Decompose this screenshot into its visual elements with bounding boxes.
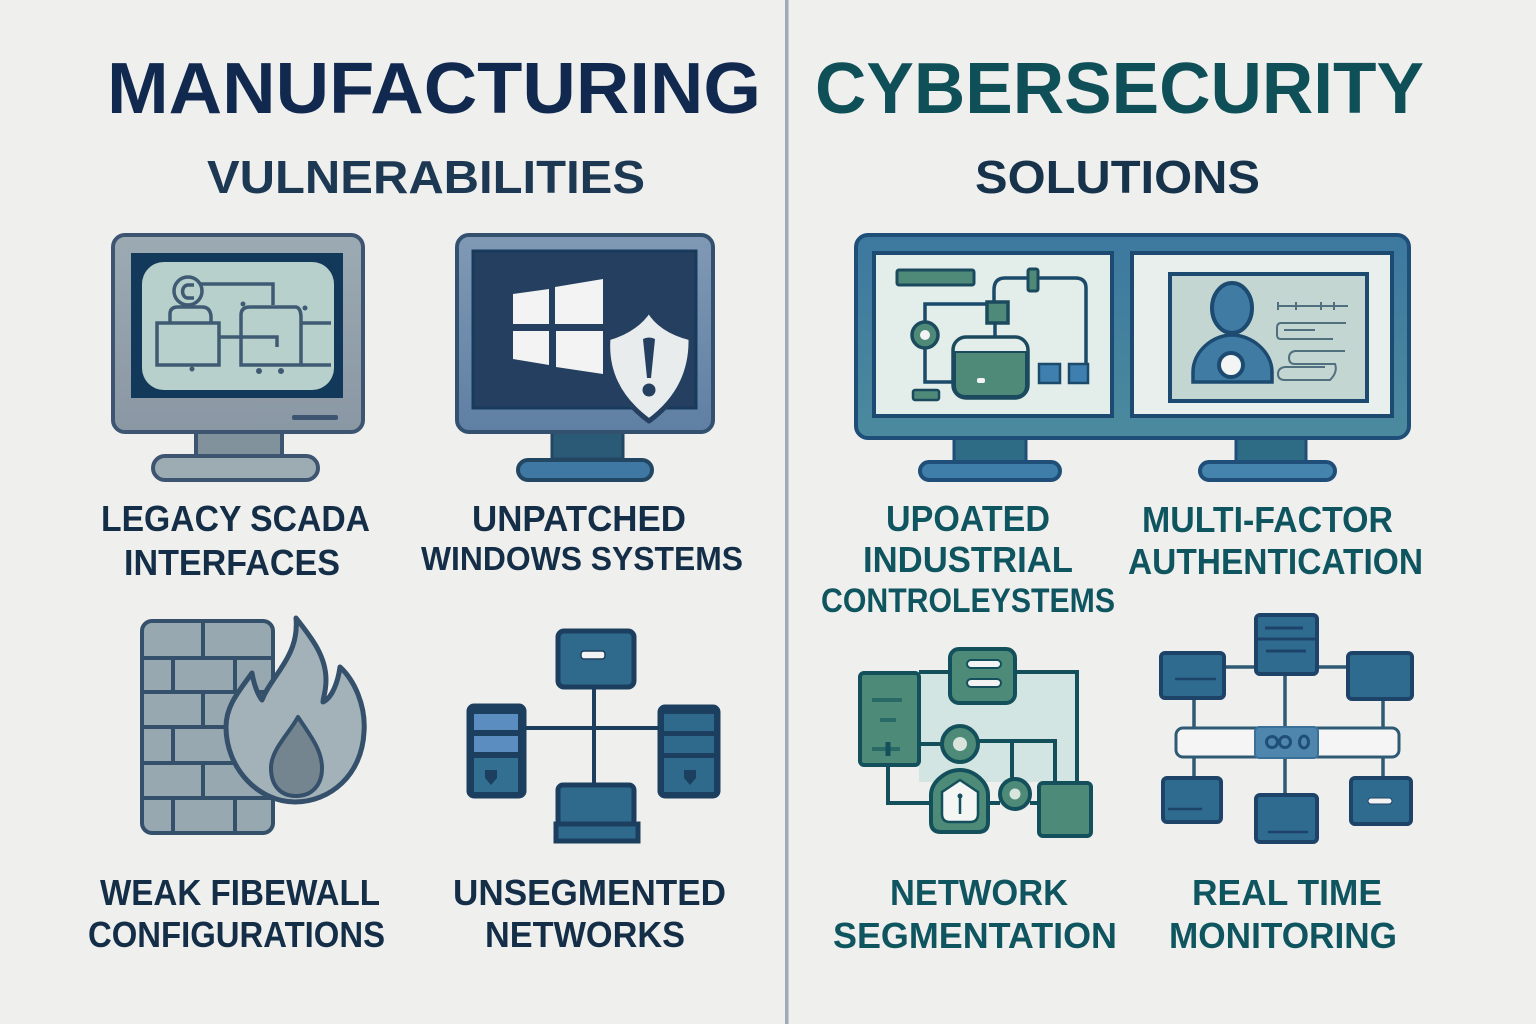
label: unpatched windows systems: UNPATCHED (472, 498, 686, 539)
panel: manufacturing vulnerabilities (88, 49, 761, 955)
icon: unpatched windows monitor (457, 235, 713, 480)
icon: network segmentation (860, 649, 1091, 836)
icon: firewall with flame (142, 618, 364, 833)
label: real time monitoring: MONITORING (1169, 915, 1397, 956)
icon: legacy scada monitor (113, 235, 363, 480)
label: weak firewall configurations: CONFIGURATIONS (88, 914, 385, 955)
left screen: process diagram (897, 269, 1088, 400)
heading: vulnerabilities: VULNERABILITIES (207, 151, 645, 203)
icon: real time monitoring (1161, 615, 1412, 842)
right screen: identity card (1170, 274, 1367, 401)
label: network segmentation (833, 872, 1117, 956)
label: legacy scada interfaces: INTERFACES (124, 542, 340, 583)
heading: solutions: SOLUTIONS (975, 151, 1260, 203)
icon: dual monitors (856, 235, 1409, 480)
label: weak firewall configurations: WEAK FIBEWALL (100, 872, 380, 913)
label: unsegmented networks (453, 872, 726, 955)
label: multi-factor authentication: MULTI-FACTOR (1142, 499, 1393, 540)
label: network segmentation: SEGMENTATION (833, 915, 1117, 956)
panel: cybersecurity solutions (815, 49, 1424, 956)
label: updated industrial control systems: INDUSTRIAL (863, 539, 1073, 580)
center divider (785, 0, 788, 1024)
label: weak firewall configurations (88, 872, 385, 955)
label: unsegmented networks: UNSEGMENTED (453, 872, 726, 913)
label: real time monitoring (1169, 872, 1397, 956)
label: unsegmented networks: NETWORKS (485, 914, 685, 955)
label: legacy scada interfaces: LEGACY SCADA (101, 498, 370, 539)
label: legacy scada interfaces (101, 498, 370, 583)
icon: unsegmented network (468, 631, 719, 841)
label: real time monitoring: REAL TIME (1192, 872, 1382, 913)
label: multi-factor authentication (1128, 499, 1423, 582)
label: multi-factor authentication: AUTHENTICATION (1128, 541, 1423, 582)
title: manufacturing: MANUFACTURING (107, 49, 761, 129)
label: unpatched windows systems: WINDOWS SYSTEMS (421, 540, 743, 577)
label: network segmentation: NETWORK (890, 872, 1068, 913)
title: cybersecurity: CYBERSECURITY (815, 49, 1424, 129)
label: updated industrial control systems: UPOATED (886, 498, 1050, 539)
label: unpatched windows systems (421, 498, 743, 577)
label: updated industrial control systems (821, 498, 1115, 620)
label: updated industrial control systems: CONTROLEYSTEMS (821, 582, 1115, 620)
